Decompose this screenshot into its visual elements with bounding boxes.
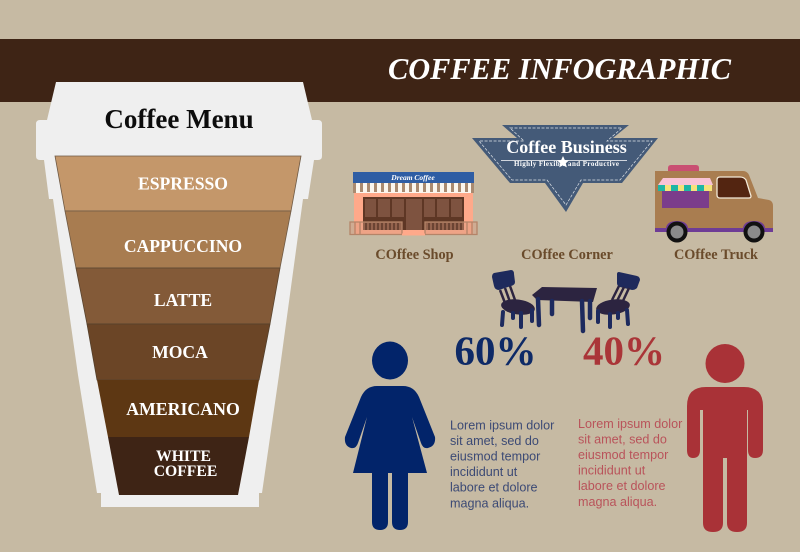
layer: espresso: ESPRESSO [138,174,228,194]
text block: men: magna aliqua. [578,495,657,509]
text block: women: incididunt ut [450,465,518,479]
title: COFFEE INFOGRAPHIC [388,51,731,86]
label: coffee corner: COffee Corner [521,247,613,263]
icon: coffee shop [350,172,477,263]
stat: 40%: 40% [583,328,665,374]
cup heading: Coffee Menu [104,104,254,134]
label: coffee shop: COffee Shop [375,247,454,263]
icon: man [687,344,763,532]
table [532,287,597,331]
text block: women: magna aliqua. [450,496,529,510]
layer: espresso [55,156,301,211]
text block: women: eiusmod tempor [450,450,540,464]
text block: men: labore et dolore [578,479,666,493]
text block: men: Lorem ipsum dolor [578,417,682,431]
icon: coffee business badge [472,125,658,263]
text block: men: incididunt ut [578,464,646,478]
layer: americano [97,380,259,437]
layer: latte [76,268,280,324]
text block: women: Lorem ipsum dolor [450,418,554,432]
icon: coffee truck [655,165,773,263]
header band [0,39,800,102]
layer: white coffee [108,437,249,495]
icon: woman [345,342,435,530]
text block: men: sit amet, sed do [578,432,667,446]
text block: women [450,418,554,510]
layer: white coffee: WHITE [156,448,211,465]
layer: cappuccino [65,211,291,268]
layer: moca [87,324,270,380]
stat: 60%: 60% [454,328,536,374]
left chair [492,270,536,327]
label: coffee truck: COffee Truck [674,247,758,263]
right chair [595,272,640,327]
layer: latte: LATTE [154,290,212,310]
layer: white coffee: COFFEE [154,463,217,480]
text block: men [578,417,682,509]
icon: coffee business badge: Highly Flexible and Productive [514,160,619,168]
layer: cappuccino: CAPPUCCINO [124,236,242,256]
text block: women: labore et dolore [450,480,538,494]
icon: table and chairs [492,270,640,331]
layer: moca: MOCA [152,342,208,362]
layer: americano: AMERICANO [126,399,240,419]
icon: coffee business badge: Coffee Business [506,137,627,157]
coffee cup menu [36,82,322,507]
cup lid and body [36,82,322,507]
text block: women: sit amet, sed do [450,434,539,448]
icon: coffee shop: Dream Coffee [390,173,435,182]
text block: men: eiusmod tempor [578,448,668,462]
